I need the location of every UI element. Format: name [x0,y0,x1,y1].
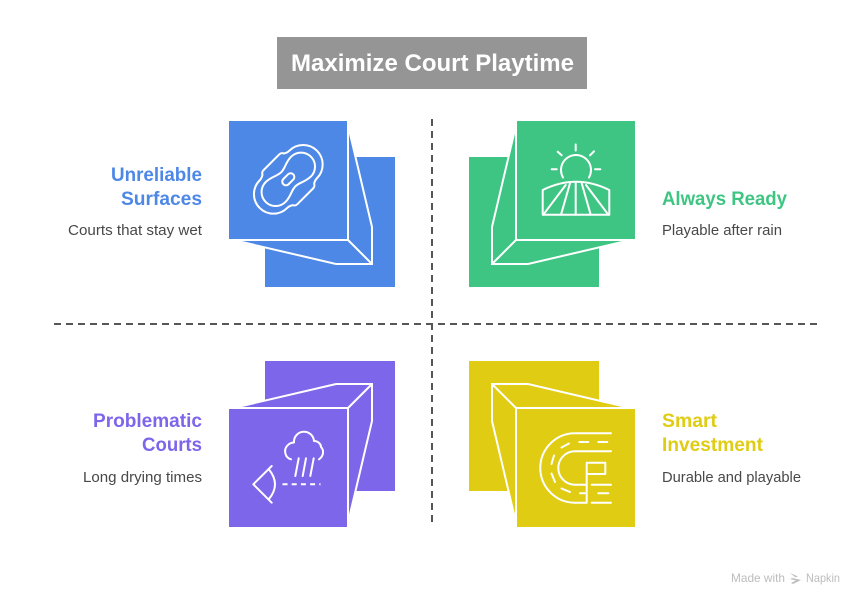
horizontal dashed divider [54,323,818,325]
icon: sun over field [543,144,609,215]
panel: unreliable surfaces cube [229,121,395,287]
heading: smart investment second line: Investment [662,434,763,456]
heading: problematic courts: Problematic [93,410,202,432]
title: Maximize Court Playtime [291,50,574,77]
title [277,37,587,89]
panel: problematic courts cube [229,361,395,527]
text: playable after rain: Playable after rain [662,223,782,239]
panel: always ready cube [469,121,635,287]
icon: race track [540,433,611,503]
panel: smart investment cube [469,361,635,527]
text: durable and playable: Durable and playable [662,470,801,486]
footer: made with napkin: Napkin [806,571,840,585]
footer: made with napkin [731,571,840,585]
footer: made with napkin: Made with [731,571,785,585]
heading: smart investment: Smart [662,410,717,432]
heading: problematic courts second line: Courts [142,434,202,456]
icon: sanitary pad [243,134,334,225]
text: courts that stay wet: Courts that stay wet [68,223,202,239]
text: long drying times: Long drying times [83,470,202,486]
heading: unreliable surfaces second line: Surfaces [121,188,202,210]
heading: always ready: Always Ready [662,188,787,210]
heading: unreliable surfaces: Unreliable [111,164,202,186]
vertical dashed divider [431,119,433,522]
icon: rain cloud and viewer [253,432,323,503]
